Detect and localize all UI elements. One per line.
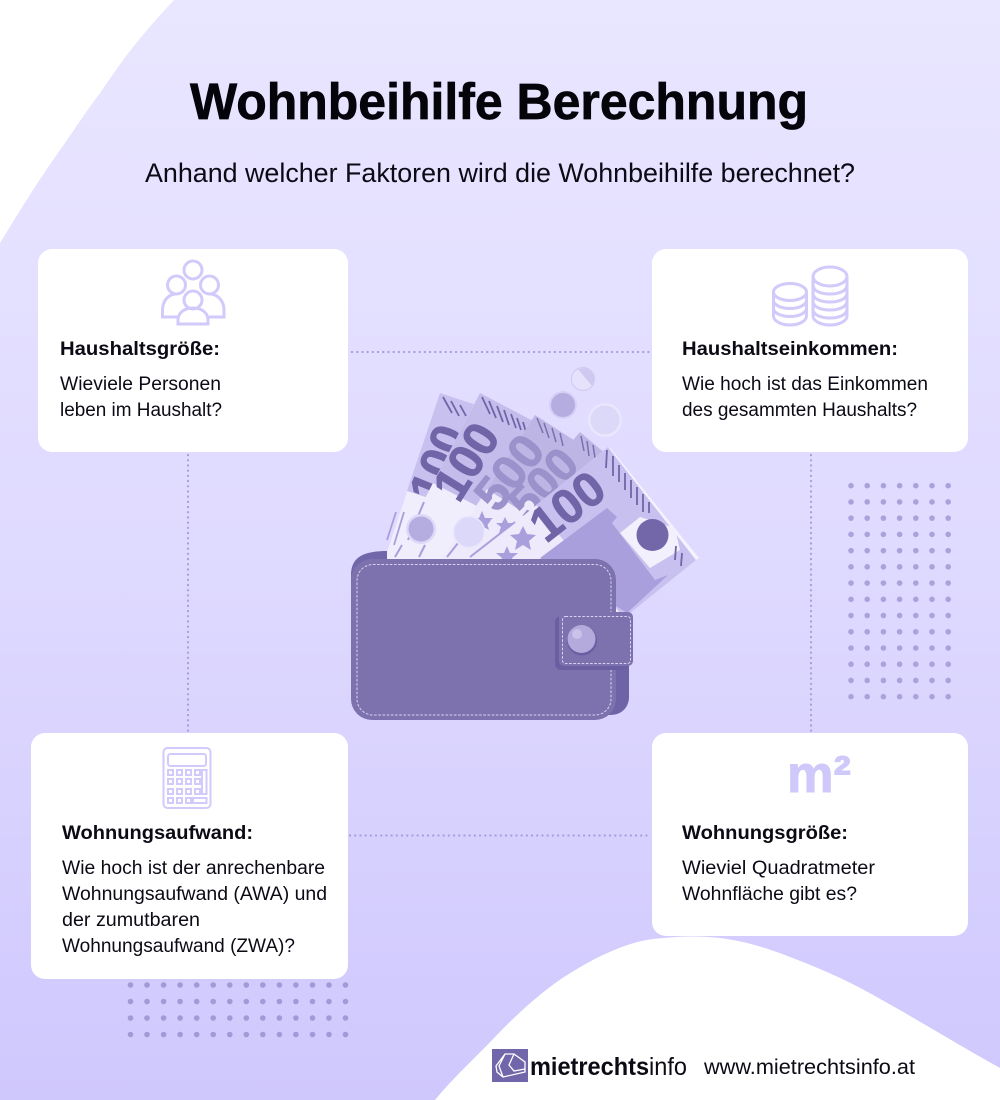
title: Wohnbeihilfe Berechnung [190, 73, 808, 130]
banknote 5 [459, 447, 699, 681]
panel: Haushaltsgröße [38, 249, 348, 452]
banknote 2 [386, 393, 560, 613]
text: Wohnungsaufwand (AWA) und [62, 884, 327, 905]
panel: Haushaltseinkommen [652, 249, 968, 452]
coins on notes [406, 514, 484, 548]
text [60, 374, 222, 421]
heading: Wohnungsaufwand: [62, 822, 253, 844]
text: Wohnungsaufwand (ZWA)? [62, 936, 295, 957]
text: Wieviel Quadratmeter [682, 858, 876, 879]
banknote 2: 100 [423, 414, 511, 510]
text: des gesammten Haushalts? [682, 400, 917, 421]
dot pattern: bottom [128, 982, 348, 1037]
heading: Haushaltsgröße: [60, 338, 220, 360]
banknote 1 [380, 393, 507, 590]
banknote 4: 500 [498, 437, 588, 529]
wallet [351, 551, 633, 720]
banknote 1: 100 [399, 418, 475, 508]
banknote 5: 100 [520, 461, 616, 553]
website: www.mietrechtsinfo.at [703, 1056, 915, 1079]
dot pattern: right [848, 483, 951, 699]
text: Wie hoch ist der anrechenbare [62, 858, 325, 879]
icon: calculator [164, 748, 210, 808]
icon: coins [774, 267, 847, 325]
logo mark [492, 1049, 528, 1082]
icon: people [162, 261, 224, 324]
subtitle: Anhand welcher Faktoren wird die Wohnbeihilfe berechnet? [145, 158, 855, 188]
icon: square metres: m² [787, 746, 851, 804]
text: leben im Haushalt? [60, 400, 222, 421]
text [682, 374, 928, 421]
text: Wie hoch ist das Einkommen [682, 374, 928, 395]
illustration: wallet with banknotes [351, 368, 699, 720]
connector lines [188, 352, 811, 836]
panel: Wohnungsaufwand [31, 733, 348, 979]
wallet clasp [555, 612, 633, 670]
coins above the wallet [549, 368, 622, 437]
heading: Haushaltseinkommen: [682, 338, 898, 360]
banknote 3: 500 [464, 425, 556, 521]
text: Wohnfläche gibt es? [682, 884, 857, 905]
text: der zumutbaren [62, 910, 200, 931]
logo wordmark: mietrechtsinfo [530, 1053, 687, 1081]
text: Wieviele Personen [60, 374, 221, 395]
logo [492, 1049, 687, 1082]
text [682, 858, 876, 905]
banknote 3 [434, 415, 600, 610]
panel: Wohnungsgröße [652, 733, 968, 936]
heading: Wohnungsgröße: [682, 822, 848, 844]
text [62, 858, 327, 957]
banknote 4 [465, 432, 613, 597]
